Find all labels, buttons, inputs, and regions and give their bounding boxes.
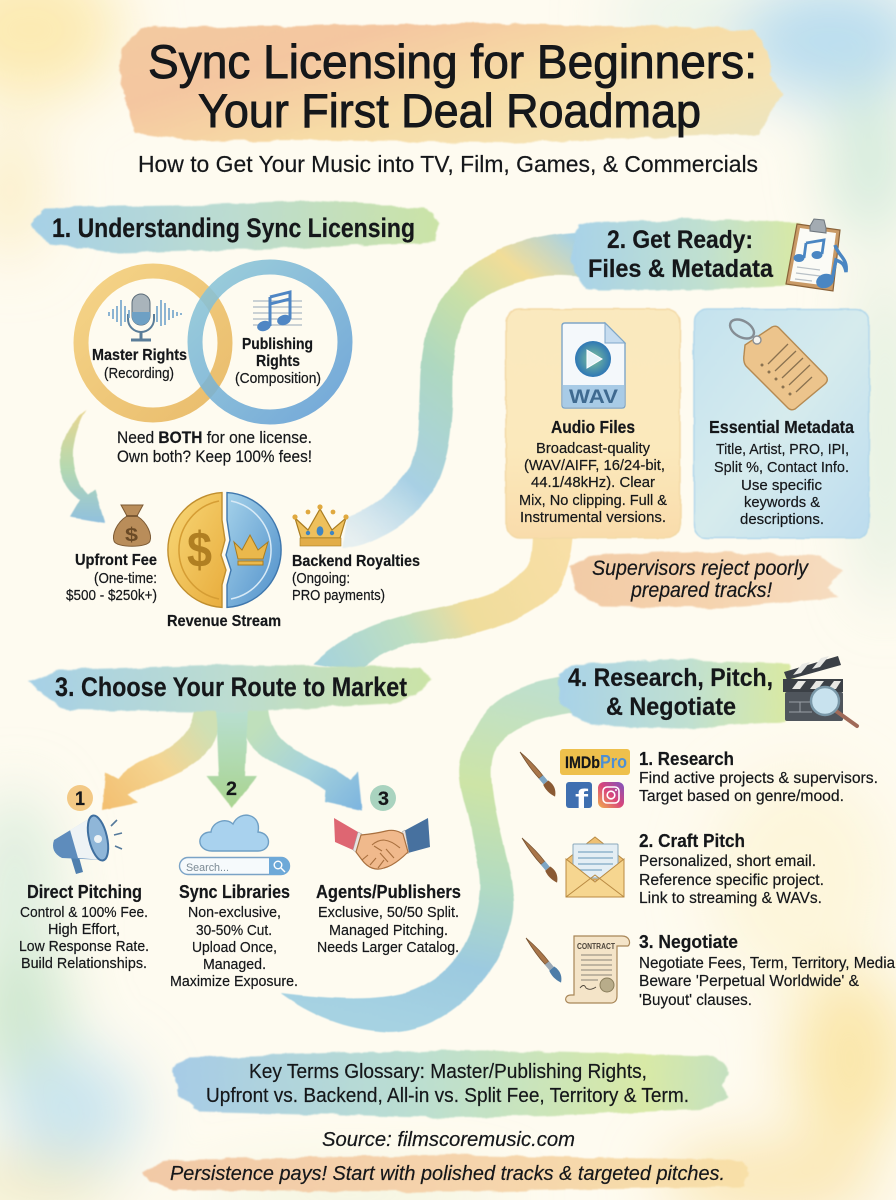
icon: search bar bbox=[180, 857, 290, 875]
arrow: route 1 to direct pitching bbox=[102, 708, 222, 810]
text: direct pitching: Control & 100% Fee. bbox=[20, 904, 148, 921]
text: audio files: 44.1/48kHz). Clear bbox=[531, 474, 655, 491]
label: backend royalties: (Ongoing: bbox=[292, 571, 350, 587]
text: sync libraries: 30-50% Cut. bbox=[196, 922, 272, 939]
text: agents publishers: Managed Pitching. bbox=[329, 922, 448, 939]
label: master rights: Master Rights bbox=[92, 347, 187, 364]
icon: clipboard with notes bbox=[786, 219, 846, 291]
icon: contract scroll: CONTRACT bbox=[577, 942, 615, 951]
icon: imdbpro and social logos: f bbox=[575, 784, 589, 814]
panel: section 1 understanding sync licensing: Own both? Keep 100% fees! bbox=[117, 447, 312, 466]
closing text: Persistence pays! Start with polished tracks & targeted pitches. bbox=[170, 1162, 725, 1185]
icon: money bag bbox=[114, 505, 150, 546]
heading 3 bbox=[28, 664, 432, 712]
text: agents publishers: Exclusive, 50/50 Split. bbox=[318, 904, 459, 921]
subtitle: How to Get Your Music into TV, Film, Games, & Commercials bbox=[138, 151, 758, 177]
icon: imdbpro and social logos: Pro bbox=[600, 752, 627, 772]
icon: clapperboard with magnifier bbox=[783, 656, 857, 726]
text: direct pitching: Low Response Rate. bbox=[19, 938, 149, 955]
text: sync libraries: Non-exclusive, bbox=[188, 904, 281, 921]
text: craft pitch bbox=[639, 830, 824, 907]
icon: revenue coin bbox=[168, 493, 281, 607]
text: research bbox=[639, 748, 878, 805]
heading 2: 2. Get Ready: bbox=[607, 226, 753, 254]
text: sync libraries: Sync Libraries bbox=[179, 882, 290, 902]
text: direct pitching: Build Relationships. bbox=[21, 955, 147, 972]
heading 4: 4. Research, Pitch, bbox=[568, 664, 773, 692]
label: upfront fee bbox=[66, 552, 157, 604]
arrow: route 3 to agents bbox=[242, 708, 362, 810]
icon: envelope bbox=[566, 837, 624, 897]
arrow: rights to revenue bbox=[60, 410, 105, 523]
panel: section 4 research pitch negotiate bbox=[517, 656, 895, 1009]
text: essential metadata: Title, Artist, PRO, IPI, bbox=[716, 441, 849, 458]
label: publishing rights: Publishing bbox=[242, 336, 313, 353]
label: revenue stream: Revenue Stream bbox=[167, 613, 281, 630]
label: backend royalties: Backend Royalties bbox=[292, 553, 420, 570]
heading 2 bbox=[570, 219, 815, 290]
text: audio files bbox=[519, 417, 667, 526]
text: direct pitching bbox=[19, 882, 149, 972]
route 1: direct pitching bbox=[19, 785, 149, 972]
text: craft pitch: Reference specific project. bbox=[639, 872, 824, 889]
flow ribbon: section 2 to section 3 bbox=[313, 530, 573, 672]
label: backend royalties: PRO payments) bbox=[292, 588, 385, 604]
title bbox=[120, 23, 783, 143]
text: negotiate: Negotiate Fees, Term, Territory, Media bbox=[639, 955, 895, 972]
icon: metadata tag bbox=[727, 316, 827, 410]
badge 1 bbox=[67, 785, 93, 811]
icon: paintbrush bbox=[517, 749, 560, 798]
text: direct pitching: High Effort, bbox=[48, 921, 120, 938]
icon: cloud bbox=[200, 815, 268, 851]
venn diagram: master and publishing rights: (Recording) bbox=[104, 366, 174, 382]
icon: handshake bbox=[334, 818, 430, 869]
text: negotiate bbox=[639, 931, 895, 1009]
heading 1: 1. Understanding Sync Licensing bbox=[52, 213, 415, 243]
badge 3 bbox=[370, 785, 396, 811]
panel: section 3 choose route bbox=[19, 664, 461, 990]
venn diagram: master and publishing rights: (Composition) bbox=[235, 371, 321, 387]
text: research: 1. Research bbox=[639, 748, 734, 769]
text: audio files: (WAV/AIFF, 16/24-bit, bbox=[524, 457, 665, 474]
card: essential metadata bbox=[694, 309, 869, 538]
text: craft pitch: Personalized, short email. bbox=[639, 853, 816, 870]
text: audio files: Instrumental versions. bbox=[520, 509, 666, 526]
text: agents publishers: Agents/Publishers bbox=[316, 882, 461, 902]
glossary text: Key Terms Glossary: Master/Publishing Rights, bbox=[249, 1061, 647, 1083]
panel: section 1 understanding sync licensing bbox=[31, 201, 440, 630]
venn diagram: master and publishing rights bbox=[81, 267, 345, 417]
icon: money bag: $ bbox=[125, 525, 139, 546]
route 2: sync libraries bbox=[170, 779, 298, 990]
venn diagram: master and publishing rights: Rights bbox=[256, 353, 300, 370]
text: essential metadata: Use specific bbox=[741, 477, 823, 494]
text: negotiate: 3. Negotiate bbox=[639, 931, 738, 952]
icon: contract scroll bbox=[566, 936, 630, 1003]
icon: megaphone bbox=[53, 814, 122, 874]
label: upfront fee: $500 - $250k+) bbox=[66, 588, 157, 604]
text: sync libraries bbox=[170, 882, 298, 990]
icon: microphone with sound waves bbox=[109, 294, 181, 340]
text: essential metadata: Split %, Contact Info. bbox=[714, 459, 849, 476]
text: audio files: Mix, No clipping. Full & bbox=[519, 492, 667, 509]
callout: supervisors reject: Supervisors reject poorly bbox=[592, 557, 809, 580]
flow ribbon: section 3 to section 4 bbox=[280, 675, 575, 1032]
icon: imdbpro and social logos bbox=[560, 749, 630, 814]
ring: master rights bbox=[81, 271, 225, 415]
text: craft pitch: 2. Craft Pitch bbox=[639, 830, 745, 851]
text: essential metadata: descriptions. bbox=[740, 511, 824, 528]
text: sync libraries: Upload Once, bbox=[192, 939, 277, 956]
icon: wav file bbox=[562, 323, 625, 408]
glossary banner bbox=[172, 1050, 729, 1118]
text: negotiate: Beware 'Perpetual Worldwide' & bbox=[639, 973, 860, 990]
route 3: agents publishers bbox=[316, 785, 461, 956]
note: need both: Need BOTH for one license. bbox=[117, 428, 312, 447]
closing banner bbox=[143, 1155, 749, 1192]
step 1: research bbox=[517, 748, 878, 814]
icon: crown bbox=[292, 504, 349, 546]
label: upfront fee: (One-time: bbox=[94, 571, 157, 587]
badge 2: 2 bbox=[226, 779, 237, 800]
text: research: Find active projects & supervisors. bbox=[639, 770, 878, 787]
text: agents publishers bbox=[316, 882, 461, 956]
text: essential metadata: Essential Metadata bbox=[709, 417, 854, 437]
callout: supervisors reject bbox=[570, 551, 842, 608]
icon: wav file: WAV bbox=[569, 387, 618, 408]
title: Your First Deal Roadmap bbox=[198, 84, 701, 137]
text: sync libraries: Managed. bbox=[203, 956, 266, 973]
heading 3: 3. Choose Your Route to Market bbox=[55, 672, 407, 702]
label: backend royalties bbox=[292, 553, 420, 604]
ring: publishing rights bbox=[195, 267, 345, 417]
icon: imdbpro and social logos: IMDb bbox=[565, 753, 600, 772]
title banner bbox=[120, 23, 783, 143]
callout: supervisors reject: prepared tracks! bbox=[630, 579, 772, 602]
text: audio files: Audio Files bbox=[551, 417, 635, 437]
label: upfront fee: Upfront Fee bbox=[75, 552, 157, 569]
text: negotiate: 'Buyout' clauses. bbox=[639, 992, 752, 1009]
title text: Sync Licensing for Beginners: bbox=[148, 35, 757, 88]
text: agents publishers: Needs Larger Catalog. bbox=[317, 939, 459, 956]
flow ribbon: section 1 to section 2 bbox=[343, 232, 590, 548]
text: direct pitching: Direct Pitching bbox=[27, 882, 142, 902]
icon: paintbrush bbox=[523, 935, 566, 984]
text: essential metadata: keywords & bbox=[744, 494, 820, 511]
icon: revenue coin: $ bbox=[187, 522, 212, 578]
icon: music notes on staff bbox=[253, 292, 302, 333]
card: audio files bbox=[506, 309, 680, 538]
text: essential metadata bbox=[709, 417, 854, 528]
heading 1 bbox=[31, 201, 440, 253]
badge 3: 3 bbox=[378, 789, 389, 810]
heading 2: Files & Metadata bbox=[588, 255, 774, 283]
text: audio files: Broadcast-quality bbox=[536, 440, 650, 457]
source line: Source: filmscoremusic.com bbox=[322, 1129, 575, 1151]
icon: paintbrush bbox=[519, 835, 562, 884]
panel: section 2 get ready bbox=[506, 219, 869, 608]
badge 1: 1 bbox=[75, 789, 85, 810]
heading 4: & Negotiate bbox=[606, 693, 736, 721]
icon: search bar: Search... bbox=[186, 862, 229, 874]
text: craft pitch: Link to streaming & WAVs. bbox=[639, 890, 822, 907]
text: research: Target based on genre/mood. bbox=[639, 788, 844, 805]
glossary banner: Upfront vs. Backend, All-in vs. Split Fee, Territory & Term. bbox=[206, 1085, 689, 1107]
arrow: route 2 to sync libraries bbox=[207, 708, 257, 808]
heading 4 bbox=[558, 659, 800, 729]
text: sync libraries: Maximize Exposure. bbox=[170, 973, 298, 990]
step 2: craft pitch bbox=[519, 830, 824, 907]
step 3: negotiate bbox=[523, 931, 895, 1009]
